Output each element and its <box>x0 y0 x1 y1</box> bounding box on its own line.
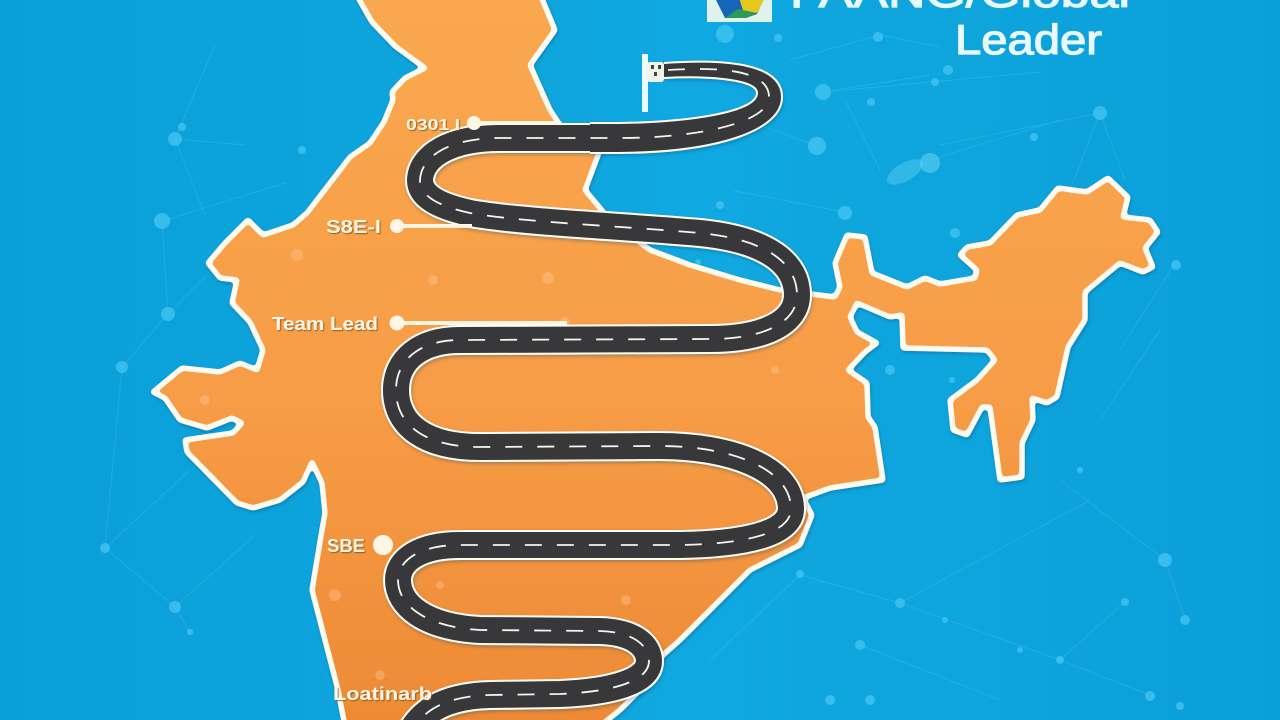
map speckles <box>200 249 779 680</box>
milestone: SSE I <box>326 217 472 237</box>
title <box>790 0 1130 63</box>
milestone: bottom label: Loatinarb <box>333 684 432 704</box>
logo <box>707 0 772 22</box>
title: Leader <box>955 16 1102 63</box>
milestone: SDE I <box>406 116 559 134</box>
milestone: SBE <box>327 535 393 556</box>
milestone: SSE I: S8E-I <box>326 217 381 237</box>
milestone: SDE I: 0301 I <box>406 117 460 134</box>
map of India <box>153 0 1158 720</box>
finish flag <box>642 54 664 112</box>
milestone: Team Lead <box>272 314 567 334</box>
milestone: SBE: SBE <box>327 536 365 556</box>
milestone: Team Lead: Team Lead <box>272 314 378 334</box>
winding road <box>396 62 797 720</box>
